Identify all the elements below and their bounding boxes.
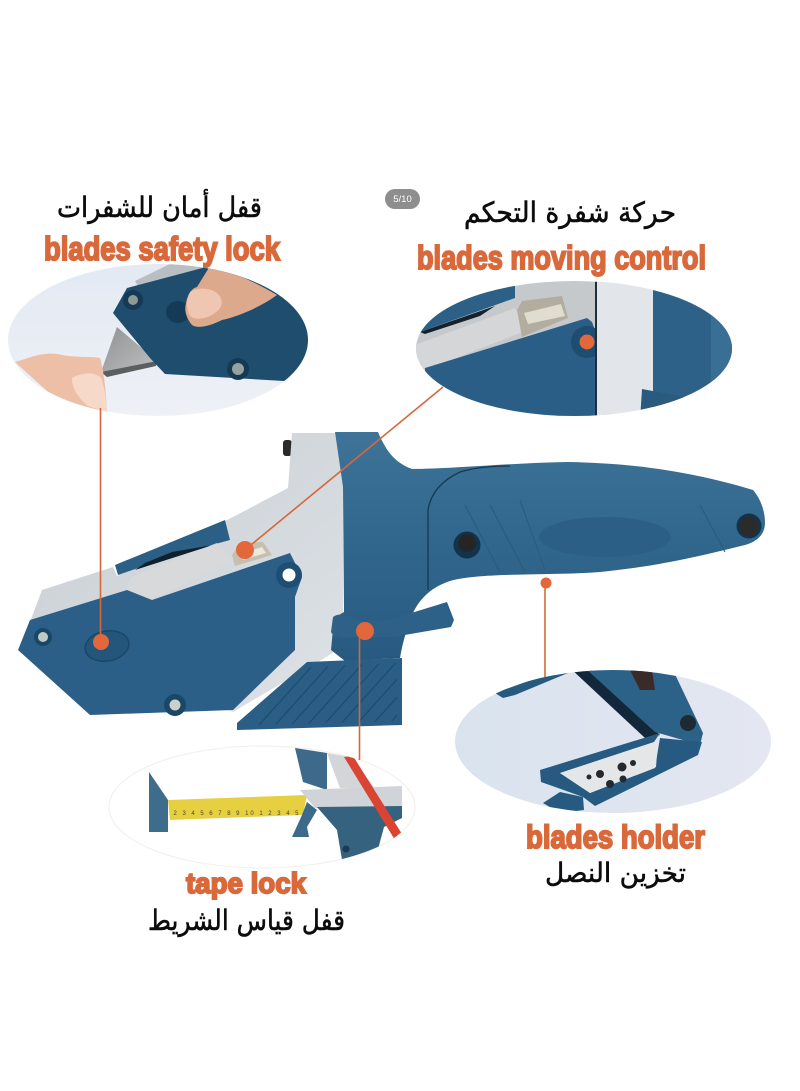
tape lock lever [331,602,454,638]
blue front plate [18,553,302,715]
heading: tape lock: tape lock [186,868,307,900]
leader line: blades holder [540,578,552,677]
heading: tape lock [148,868,345,937]
back screws [283,440,292,456]
callout photo: moving control detail [416,281,732,416]
hatched base wedge [237,658,402,730]
heading: blades safety lock: قفل أمان للشفرات [57,188,262,224]
slider [517,296,568,337]
callout photo: tape lock detail: 2 3 4 5 6 7 8 9 10 1 2 3 4 5 [174,811,299,817]
main product: gypsum cutter tool [18,432,765,730]
tool [295,748,327,790]
heading: blades holder: تخزين النصل [545,858,686,889]
heading: blades holder [526,819,705,889]
light strip [127,543,233,600]
tape [168,795,307,820]
blue column and handle [331,432,765,661]
leader line: moving control [236,387,443,559]
thumb [185,266,277,327]
page indicator badge [385,189,420,209]
callout photo: blades holder detail [455,670,771,813]
blade [102,327,154,377]
page indicator badge: 5/10 [393,194,412,205]
pencil [344,756,402,840]
heading: tape lock: قفل قياس الشريط [148,904,345,937]
callout photo: tape lock detail [109,746,415,868]
heading: blades moving control: حركة شفرة التحكم [464,196,676,229]
heading: blades moving control: blades moving control [417,239,706,276]
slider [232,542,272,566]
heading: blades holder: blades holder [526,819,705,855]
heading: blades safety lock [44,188,281,267]
grey body [30,433,343,712]
leader line: tape lock [356,622,374,760]
blade tray [540,733,702,806]
end plate [149,772,168,832]
leader line: safety lock [93,408,109,650]
heading: blades safety lock: blades safety lock [44,230,281,267]
heading: blades moving control [417,196,706,276]
lower fingers [15,354,107,412]
callout photo: safety lock detail [8,264,308,416]
